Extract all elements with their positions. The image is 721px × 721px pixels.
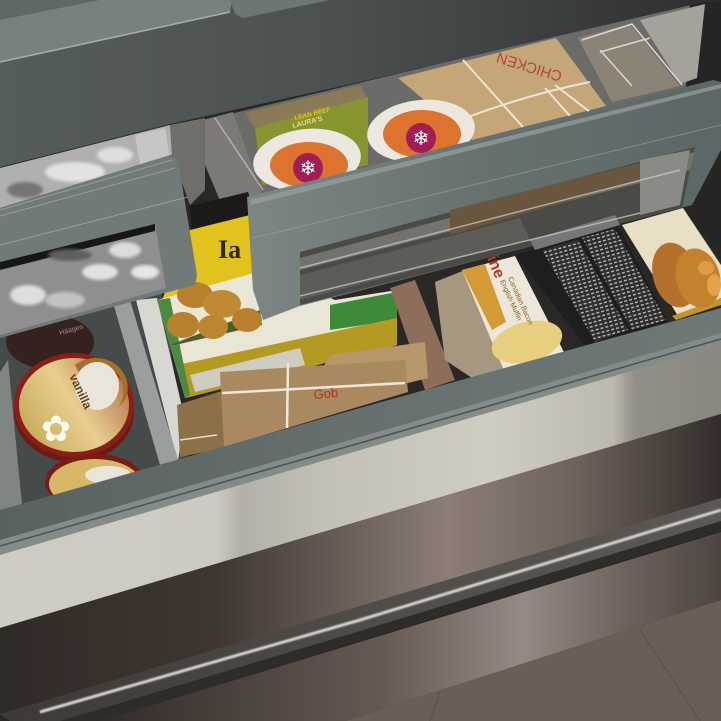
- right chrome wall: [640, 4, 705, 84]
- left upper drawer contents: [0, 125, 172, 208]
- upper freezer interior back: [205, 0, 721, 270]
- box: English muffin: Canadian Bacon: [506, 276, 534, 326]
- drawer handle: [0, 498, 721, 721]
- box: English muffin: ine: [483, 253, 508, 281]
- box: nuggets: [157, 215, 397, 398]
- tub: vanilla ice cream: vanilla: [66, 371, 95, 411]
- lower bin divider: [114, 300, 178, 465]
- package: paper wrapped chicken: [398, 38, 606, 140]
- left upper drawer panel: [0, 155, 197, 338]
- tub: ice cream right: ❄: [413, 128, 429, 150]
- tub: ice cream right: [364, 95, 478, 167]
- upper drawer clear window: [300, 147, 695, 305]
- clear bin right: [578, 24, 682, 102]
- right interior dark wall: [680, 0, 721, 250]
- lower drawer grey rim: [0, 308, 721, 552]
- package: Laura's box: LAURA'S: [292, 116, 324, 130]
- base of freezer door: [100, 532, 721, 721]
- lower drawer interior left: [0, 285, 190, 515]
- paper wrapped packages: Gob: [313, 385, 339, 402]
- rim groove: [0, 333, 721, 556]
- floor: [345, 600, 721, 721]
- paper wrapped packages: [177, 342, 428, 457]
- box: English muffin: English Muffin: [498, 279, 522, 322]
- tub: dark lid: [6, 315, 94, 369]
- tub: ice cream left: [250, 124, 364, 196]
- white inner wall: [136, 298, 185, 460]
- clear bin left wall: [170, 112, 263, 260]
- lower bin left wall: [0, 360, 22, 512]
- tub: dark lid: Häagen: [59, 324, 84, 337]
- upper drawer front panel: [247, 80, 721, 320]
- box: nuggets: Ia: [218, 235, 241, 264]
- package: paper wrapped chicken: CHICKEN: [495, 48, 564, 84]
- tub: second vanilla lid: [45, 454, 145, 510]
- waffle box: [622, 208, 721, 320]
- tub: vanilla ice cream: [14, 353, 134, 462]
- box: English muffin: [435, 253, 567, 380]
- tub: ice cream left: ❄: [300, 158, 316, 180]
- dark boxes: [515, 226, 668, 345]
- floral package: [390, 280, 455, 390]
- stainless bright band: [0, 345, 721, 628]
- dark gap behind box: [190, 192, 255, 232]
- top door panel: [0, 0, 721, 167]
- package: Laura's box: [245, 85, 368, 185]
- marbled window: [0, 224, 166, 335]
- package: Laura's box: LEAN BEEF: [294, 106, 331, 122]
- tub: vanilla ice cream: ✿: [41, 408, 71, 449]
- stainless lower front: [0, 414, 721, 716]
